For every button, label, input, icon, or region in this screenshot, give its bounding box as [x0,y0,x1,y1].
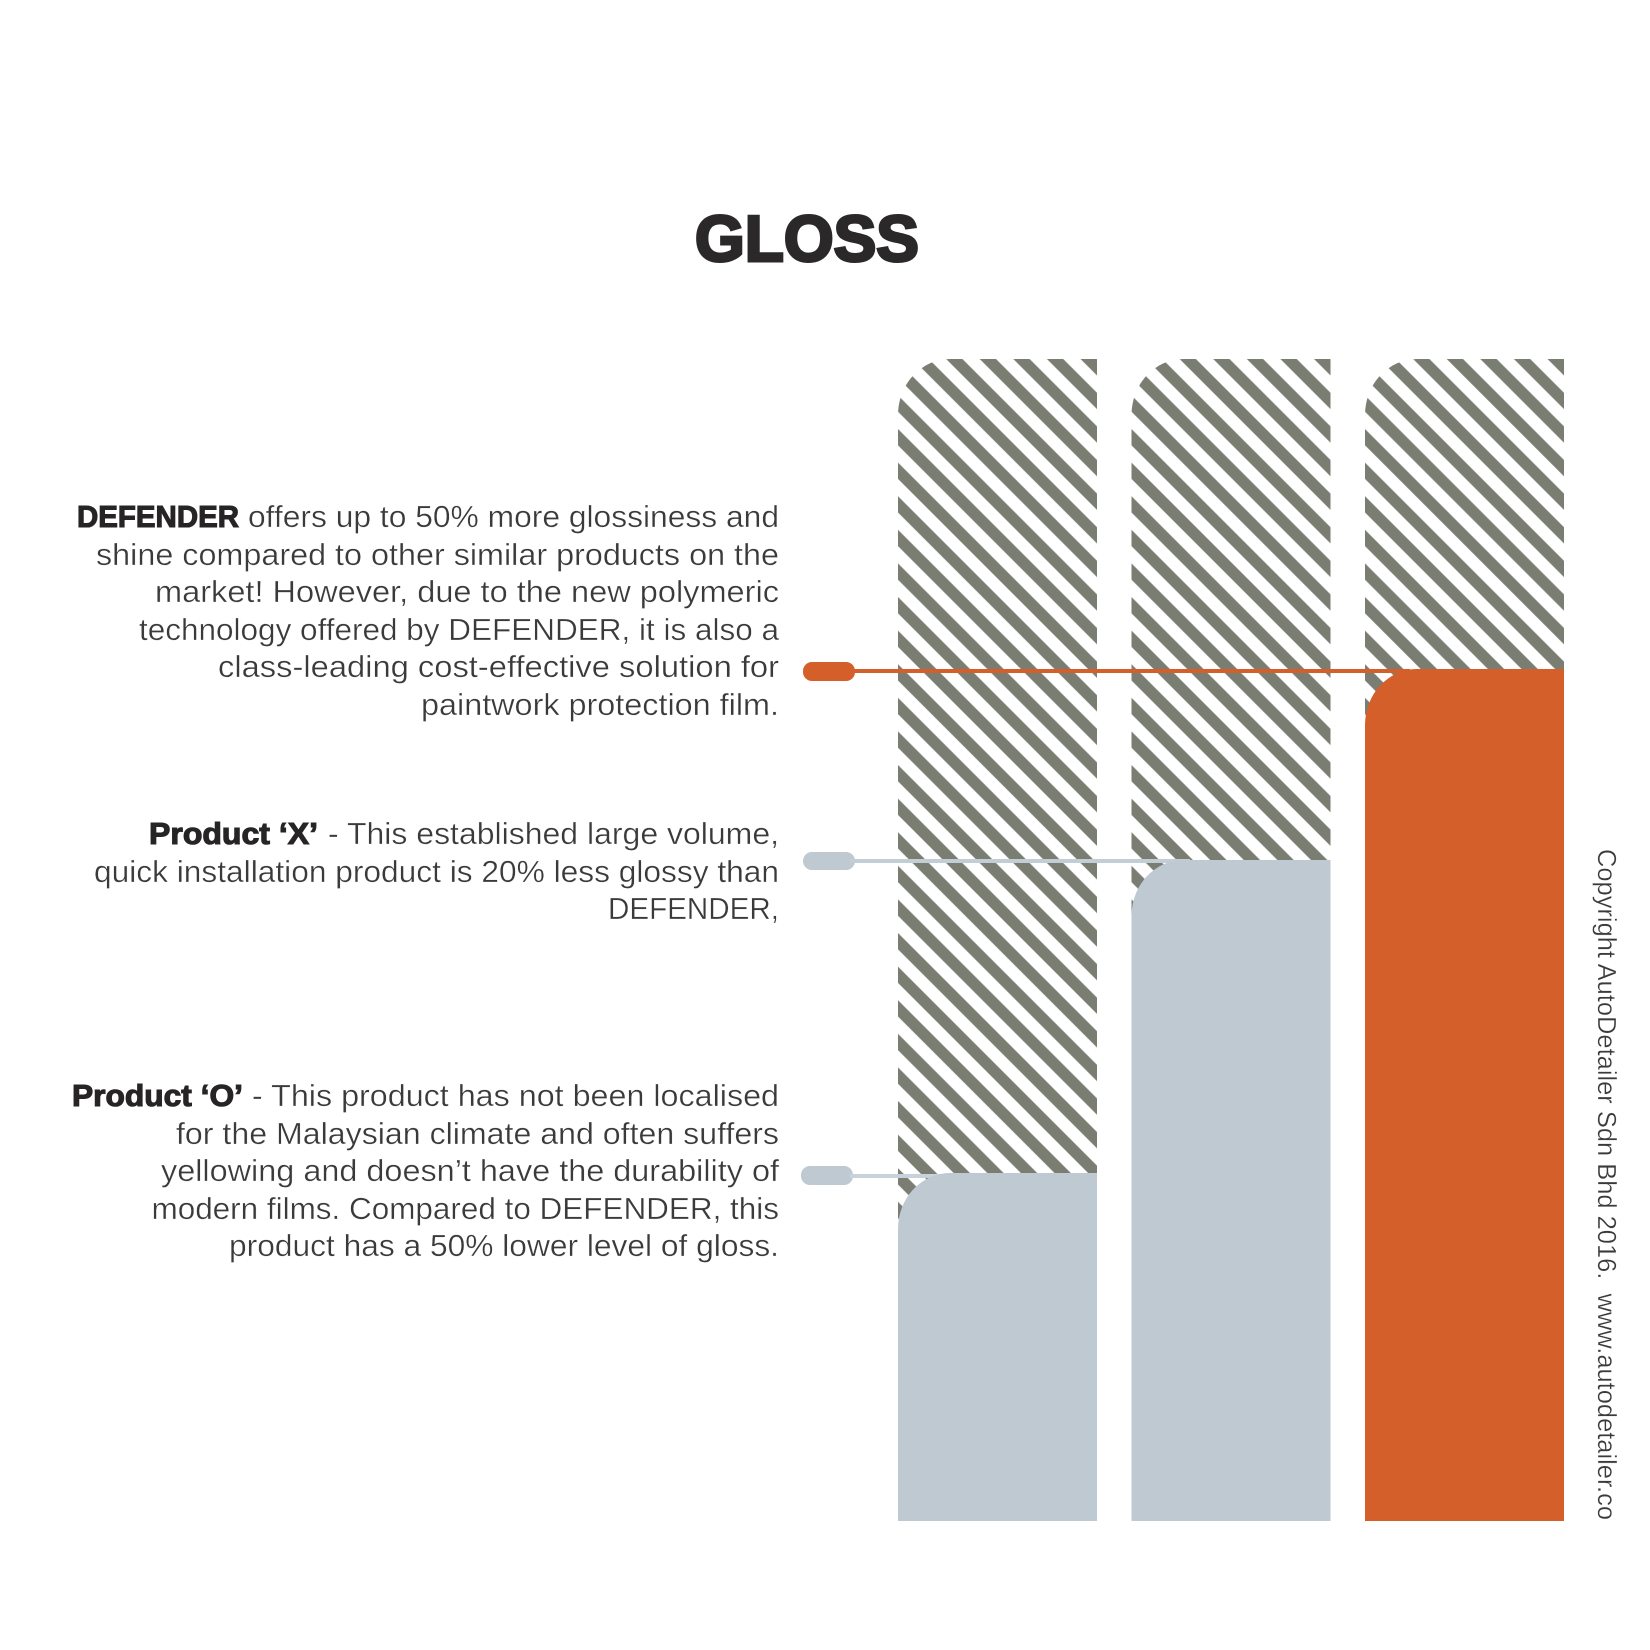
text block: DEFENDER: market! However, due to the new polymeric [155,574,779,609]
text block: Product O: - This product has not been localised [252,1078,779,1113]
text block: Product O: product has a 50% lower level of gloss. [229,1228,779,1263]
title: GLOSS [695,202,919,275]
text block: DEFENDER: DEFENDER [77,499,239,534]
leader: Product X [803,852,1190,870]
text block: Product X: Product ‘X’ [149,816,318,851]
leader: Product O [801,1166,940,1185]
text block: DEFENDER: offers up to 50% more glossiness and [248,499,779,534]
bar value: Product X [1132,860,1330,1521]
text block: Product X: quick installation product is 20% less glossy than [94,854,779,889]
text block: DEFENDER: paintwork protection film. [421,687,779,722]
bar value: DEFENDER [1365,669,1564,1521]
text block: Product X [94,816,779,926]
text block: Product X: - This established large volume, [328,816,779,851]
bar track: Product X [1132,359,1330,1521]
bar value: Product O [898,1173,1097,1521]
text block: DEFENDER: shine compared to other similar products on the [96,537,779,572]
text block: Product X: DEFENDER, [608,891,779,926]
text block: Product O: Product ‘O’ [72,1078,243,1113]
bar chart [801,359,1564,1521]
text block: Product O: for the Malaysian climate and often suffers [176,1116,779,1151]
bar track: DEFENDER [1365,359,1564,1521]
text block: DEFENDER: class-leading cost-effective solution for [218,649,779,684]
text block: DEFENDER [77,499,780,722]
text block: DEFENDER: technology offered by DEFENDER, it is also a [139,612,780,647]
text block: Product O [72,1078,779,1263]
text block: Product O: yellowing and doesn’t have the durability of [161,1153,779,1188]
copyright: Copyright AutoDetailer Sdn Bhd 2016. www.autodetailer.co [1592,849,1622,1520]
text block: Product O: modern films. Compared to DEFENDER, this [152,1191,779,1226]
bar track: Product O [898,359,1097,1521]
leader: DEFENDER [803,662,1410,681]
